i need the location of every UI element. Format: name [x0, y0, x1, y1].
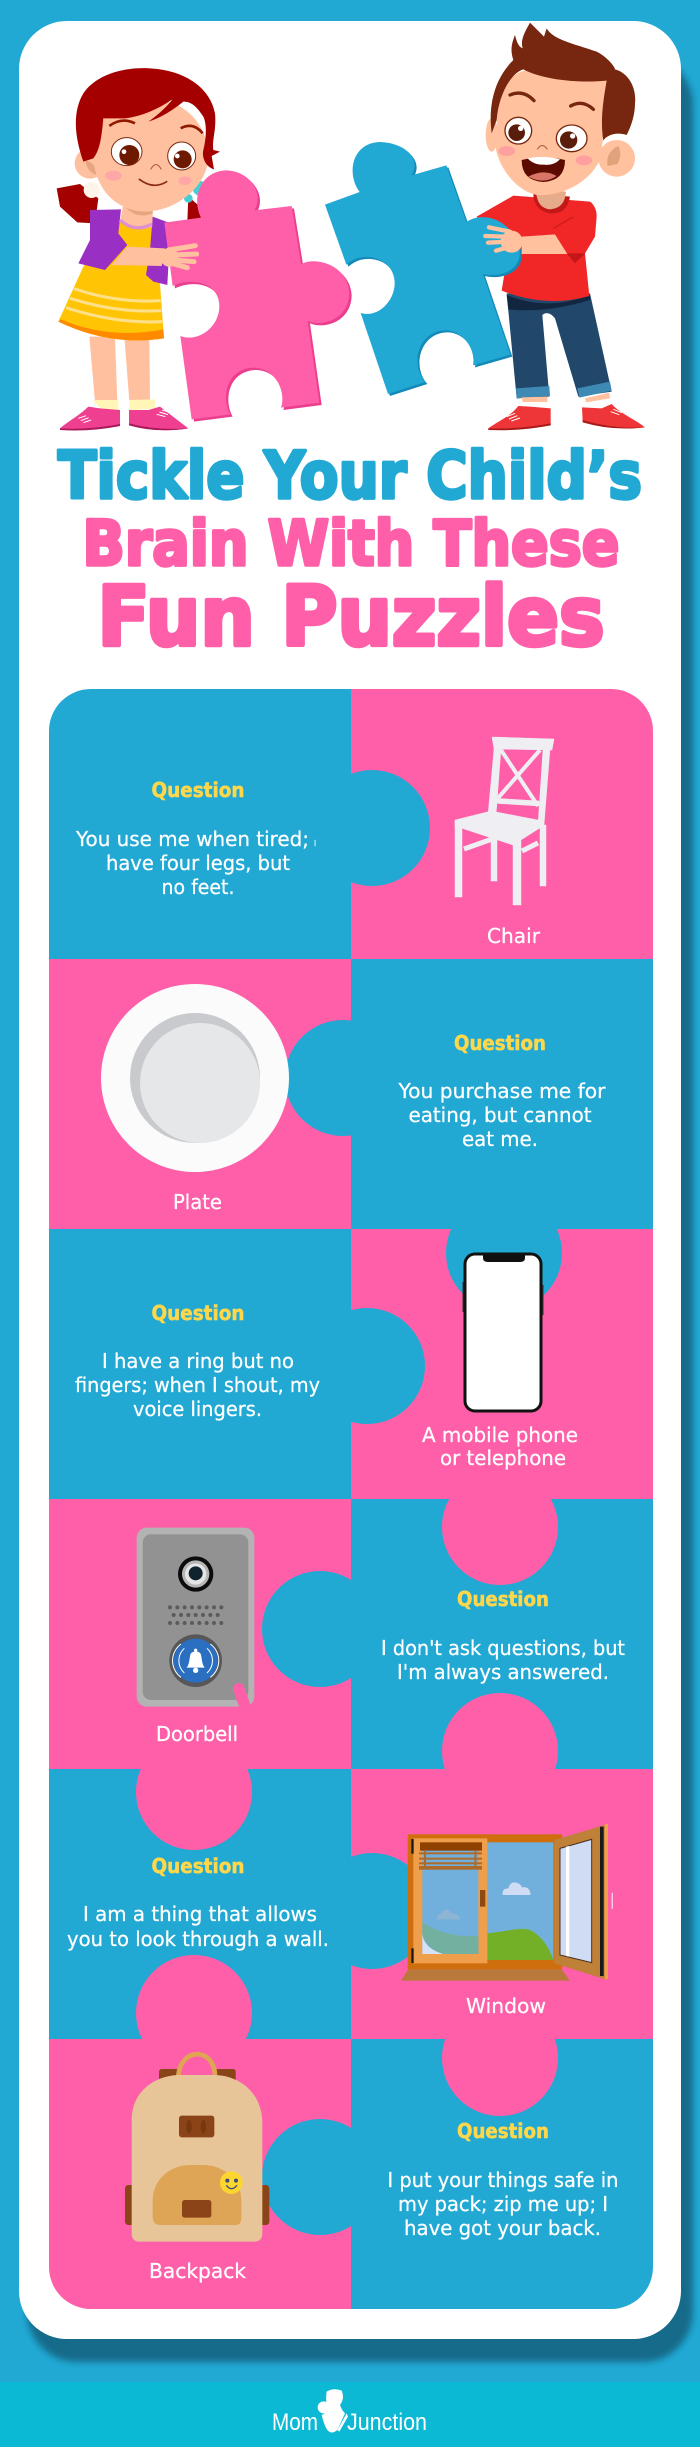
title: Brain With These	[82, 507, 620, 580]
panel: question 1 text: no feet.	[162, 875, 234, 899]
answer label: plate: Plate	[173, 1190, 222, 1214]
panel: question 4 text: I don't ask questions, but	[381, 1636, 625, 1660]
panel: question 6 text	[388, 2119, 618, 2240]
panel: question 6 text: have got your back.	[404, 2216, 601, 2240]
footer logo: MomJunction: Junction	[347, 2409, 427, 2436]
title: Fun Puzzles	[98, 570, 604, 665]
panel: question 2 text: You purchase me for	[397, 1079, 606, 1103]
panel: question 6 text: my pack; zip me up; I	[398, 2192, 608, 2216]
icon: window	[401, 1824, 613, 1981]
illustration: girl holding pink puzzle piece	[57, 68, 352, 430]
panel: question 2 text	[397, 1031, 606, 1151]
panel: question 3 text: fingers; when I shout, my	[75, 1373, 320, 1397]
panel: question 4 text	[381, 1587, 625, 1684]
answer label: mobile phone: or telephone	[440, 1446, 566, 1470]
answer label: doorbell: Doorbell	[156, 1722, 238, 1746]
footer logo: MomJunction: Mom	[272, 2409, 318, 2436]
icon: chair	[455, 737, 554, 905]
illustration: boy holding blue puzzle piece	[325, 23, 645, 430]
panel: question 3 text: I have a ring but no	[102, 1349, 294, 1373]
footer band	[0, 2382, 700, 2447]
panel: question 2 text: eat me.	[462, 1127, 538, 1151]
title	[58, 439, 642, 665]
panel: question 1 text	[75, 778, 316, 899]
icon: plate	[101, 984, 289, 1172]
icon: doorbell	[137, 1528, 254, 1707]
panel: question 3 text: Question	[152, 1301, 244, 1325]
icon: backpack	[125, 2054, 269, 2242]
panel: question 2 text: Question	[454, 1031, 546, 1055]
panel: question 1 text: I	[314, 839, 316, 848]
answer label: window: Window	[466, 1994, 546, 2018]
panel: question 5 text: you to look through a wall.	[67, 1927, 329, 1951]
panel: question 5 text: Question	[152, 1854, 244, 1878]
answer label: mobile phone: A mobile phone	[422, 1423, 578, 1447]
panel: question 3 text: voice lingers.	[133, 1397, 262, 1421]
answer label: mobile phone	[422, 1423, 578, 1470]
puzzle grid background	[49, 689, 653, 2309]
panel: question 6 text: I put your things safe in	[388, 2168, 618, 2192]
panel: question 1 text: Question	[152, 778, 244, 802]
panel: question 2 text: eating, but cannot	[408, 1103, 592, 1127]
answer label: chair: Chair	[487, 924, 541, 948]
panel: question 4 text: Question	[457, 1587, 549, 1611]
panel: question 6 text: Question	[457, 2119, 549, 2143]
answer label: backpack: Backpack	[149, 2259, 246, 2283]
panel: question 1 text: You use me when tired;	[75, 827, 309, 851]
icon: mobile phone	[462, 1254, 544, 1411]
panel: question 5 text: I am a thing that allows	[83, 1902, 317, 1926]
footer logo: MomJunction	[272, 2389, 427, 2436]
panel: question 4 text: I'm always answered.	[397, 1660, 609, 1684]
panel: question 5 text	[67, 1854, 329, 1951]
panel: question 3 text	[75, 1301, 320, 1421]
panel: question 1 text: have four legs, but	[106, 851, 290, 875]
